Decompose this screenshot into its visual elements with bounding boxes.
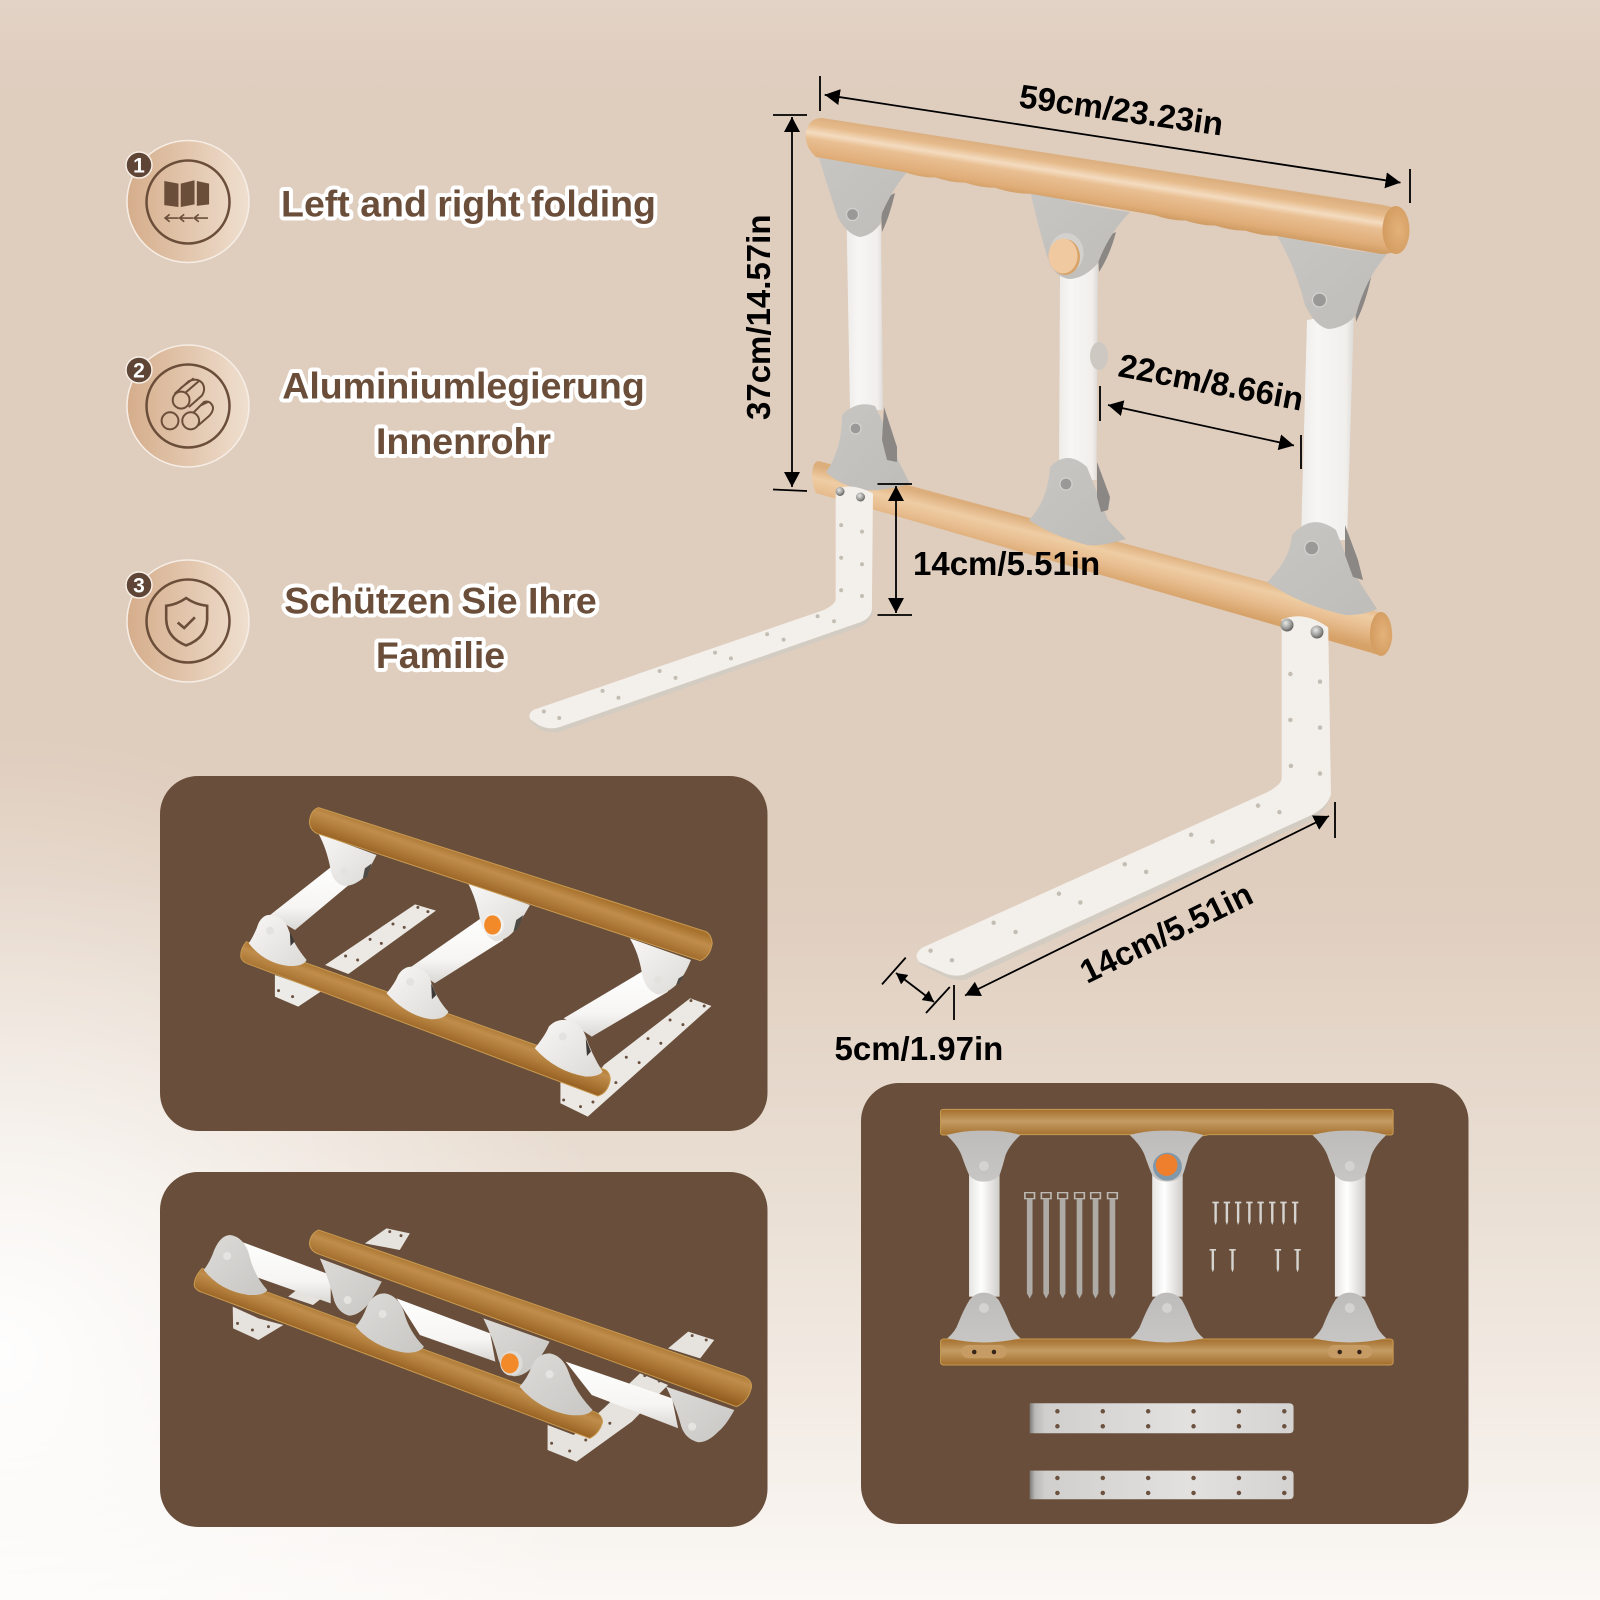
mounting plates <box>275 904 711 1117</box>
dimension: height 37cm: 37cm/14.57in <box>740 215 777 420</box>
cable ties <box>1025 1193 1117 1299</box>
dimension: foot length 14cm: 14cm/5.51in <box>1074 875 1258 990</box>
icon: tubes badge: 2 <box>133 360 145 382</box>
lower rail <box>812 461 1392 656</box>
label: protect your family: Schützen Sie Ihre <box>284 580 597 622</box>
upper bracket right <box>1275 232 1387 329</box>
post middle <box>1059 262 1098 480</box>
upper hinges <box>320 1258 734 1442</box>
post right <box>1301 312 1354 540</box>
top rail <box>806 118 1410 254</box>
mounting plates <box>233 1228 714 1462</box>
top wooden rail <box>941 1109 1393 1136</box>
dimension: spacing 22cm <box>1100 347 1306 469</box>
label: protect your family: Familie <box>376 634 505 676</box>
lower bracket right <box>1267 522 1377 615</box>
feature 3: family protection <box>126 560 597 682</box>
upper bracket middle with button <box>1030 190 1130 279</box>
dimension: bracket height 14cm <box>878 484 1100 615</box>
lower bracket left <box>826 404 910 490</box>
upper hinges <box>318 833 691 995</box>
pins <box>984 1166 1350 1308</box>
arms <box>270 867 668 1037</box>
bottom wooden rail <box>241 942 610 1096</box>
left mounting bracket foot shadow <box>529 610 873 732</box>
upper bracket left <box>818 155 907 237</box>
label: aluminium alloy inner tube: Innenrohr <box>376 420 551 462</box>
icon: shield badge <box>126 560 249 682</box>
top wooden rail <box>309 1230 752 1407</box>
orange button <box>483 914 504 936</box>
dimension: bracket height 14cm: 14cm/5.51in <box>913 545 1100 582</box>
slots behind upper hinges <box>881 193 1372 322</box>
mounting brackets <box>529 487 1331 980</box>
flat plate 2 <box>1030 1471 1294 1499</box>
posts <box>969 1173 1365 1297</box>
main product: bed rail <box>529 118 1410 980</box>
panel: folded half <box>160 776 768 1131</box>
label: left and right folding: Left and right folding <box>281 182 656 224</box>
dimension: width 59cm: 59cm/23.23in <box>1017 77 1226 143</box>
post left <box>847 225 883 410</box>
orange button <box>1153 1153 1182 1181</box>
rivets <box>836 487 1324 638</box>
panel: fully folded <box>160 1172 768 1527</box>
flat plate 1 <box>1030 1403 1294 1433</box>
panel: package contents <box>861 1083 1468 1524</box>
dimension: width 59cm <box>820 76 1410 203</box>
icon: folding panels badge <box>126 140 249 262</box>
lower hinges <box>249 915 603 1077</box>
feature 1: folding <box>126 140 656 262</box>
lower hinges <box>204 1235 593 1415</box>
feature 2: aluminium tube <box>126 345 645 467</box>
lower bracket middle <box>1029 458 1126 545</box>
top wooden rail <box>309 808 712 961</box>
right bracket <box>917 616 1331 980</box>
label: aluminium alloy inner tube: Aluminiumlegierung <box>282 364 645 406</box>
pins <box>227 1256 692 1427</box>
dimension: foot width 5cm <box>834 958 1003 1067</box>
bottom wooden rail <box>194 1268 603 1438</box>
dimension: foot length 14cm <box>954 802 1335 1020</box>
icon: shield badge: 3 <box>133 574 145 598</box>
lower hinge slots and pins <box>270 931 591 1056</box>
back knob <box>1090 342 1108 370</box>
upper hinges <box>947 1131 1386 1182</box>
left bracket <box>529 487 873 728</box>
orange button <box>500 1351 523 1376</box>
dimension: foot width 5cm: 5cm/1.97in <box>834 1030 1003 1067</box>
icon: folding panels badge: 1 <box>133 154 145 178</box>
lower hinges <box>947 1293 1386 1342</box>
bottom wooden rail <box>941 1339 1393 1365</box>
dimension: height 37cm <box>740 115 807 491</box>
tubes <box>237 1240 678 1428</box>
screws <box>1210 1202 1301 1272</box>
icon: tubes badge <box>126 345 249 467</box>
dimension: spacing 22cm: 22cm/8.66in <box>1116 347 1306 418</box>
hinge details <box>344 863 684 985</box>
